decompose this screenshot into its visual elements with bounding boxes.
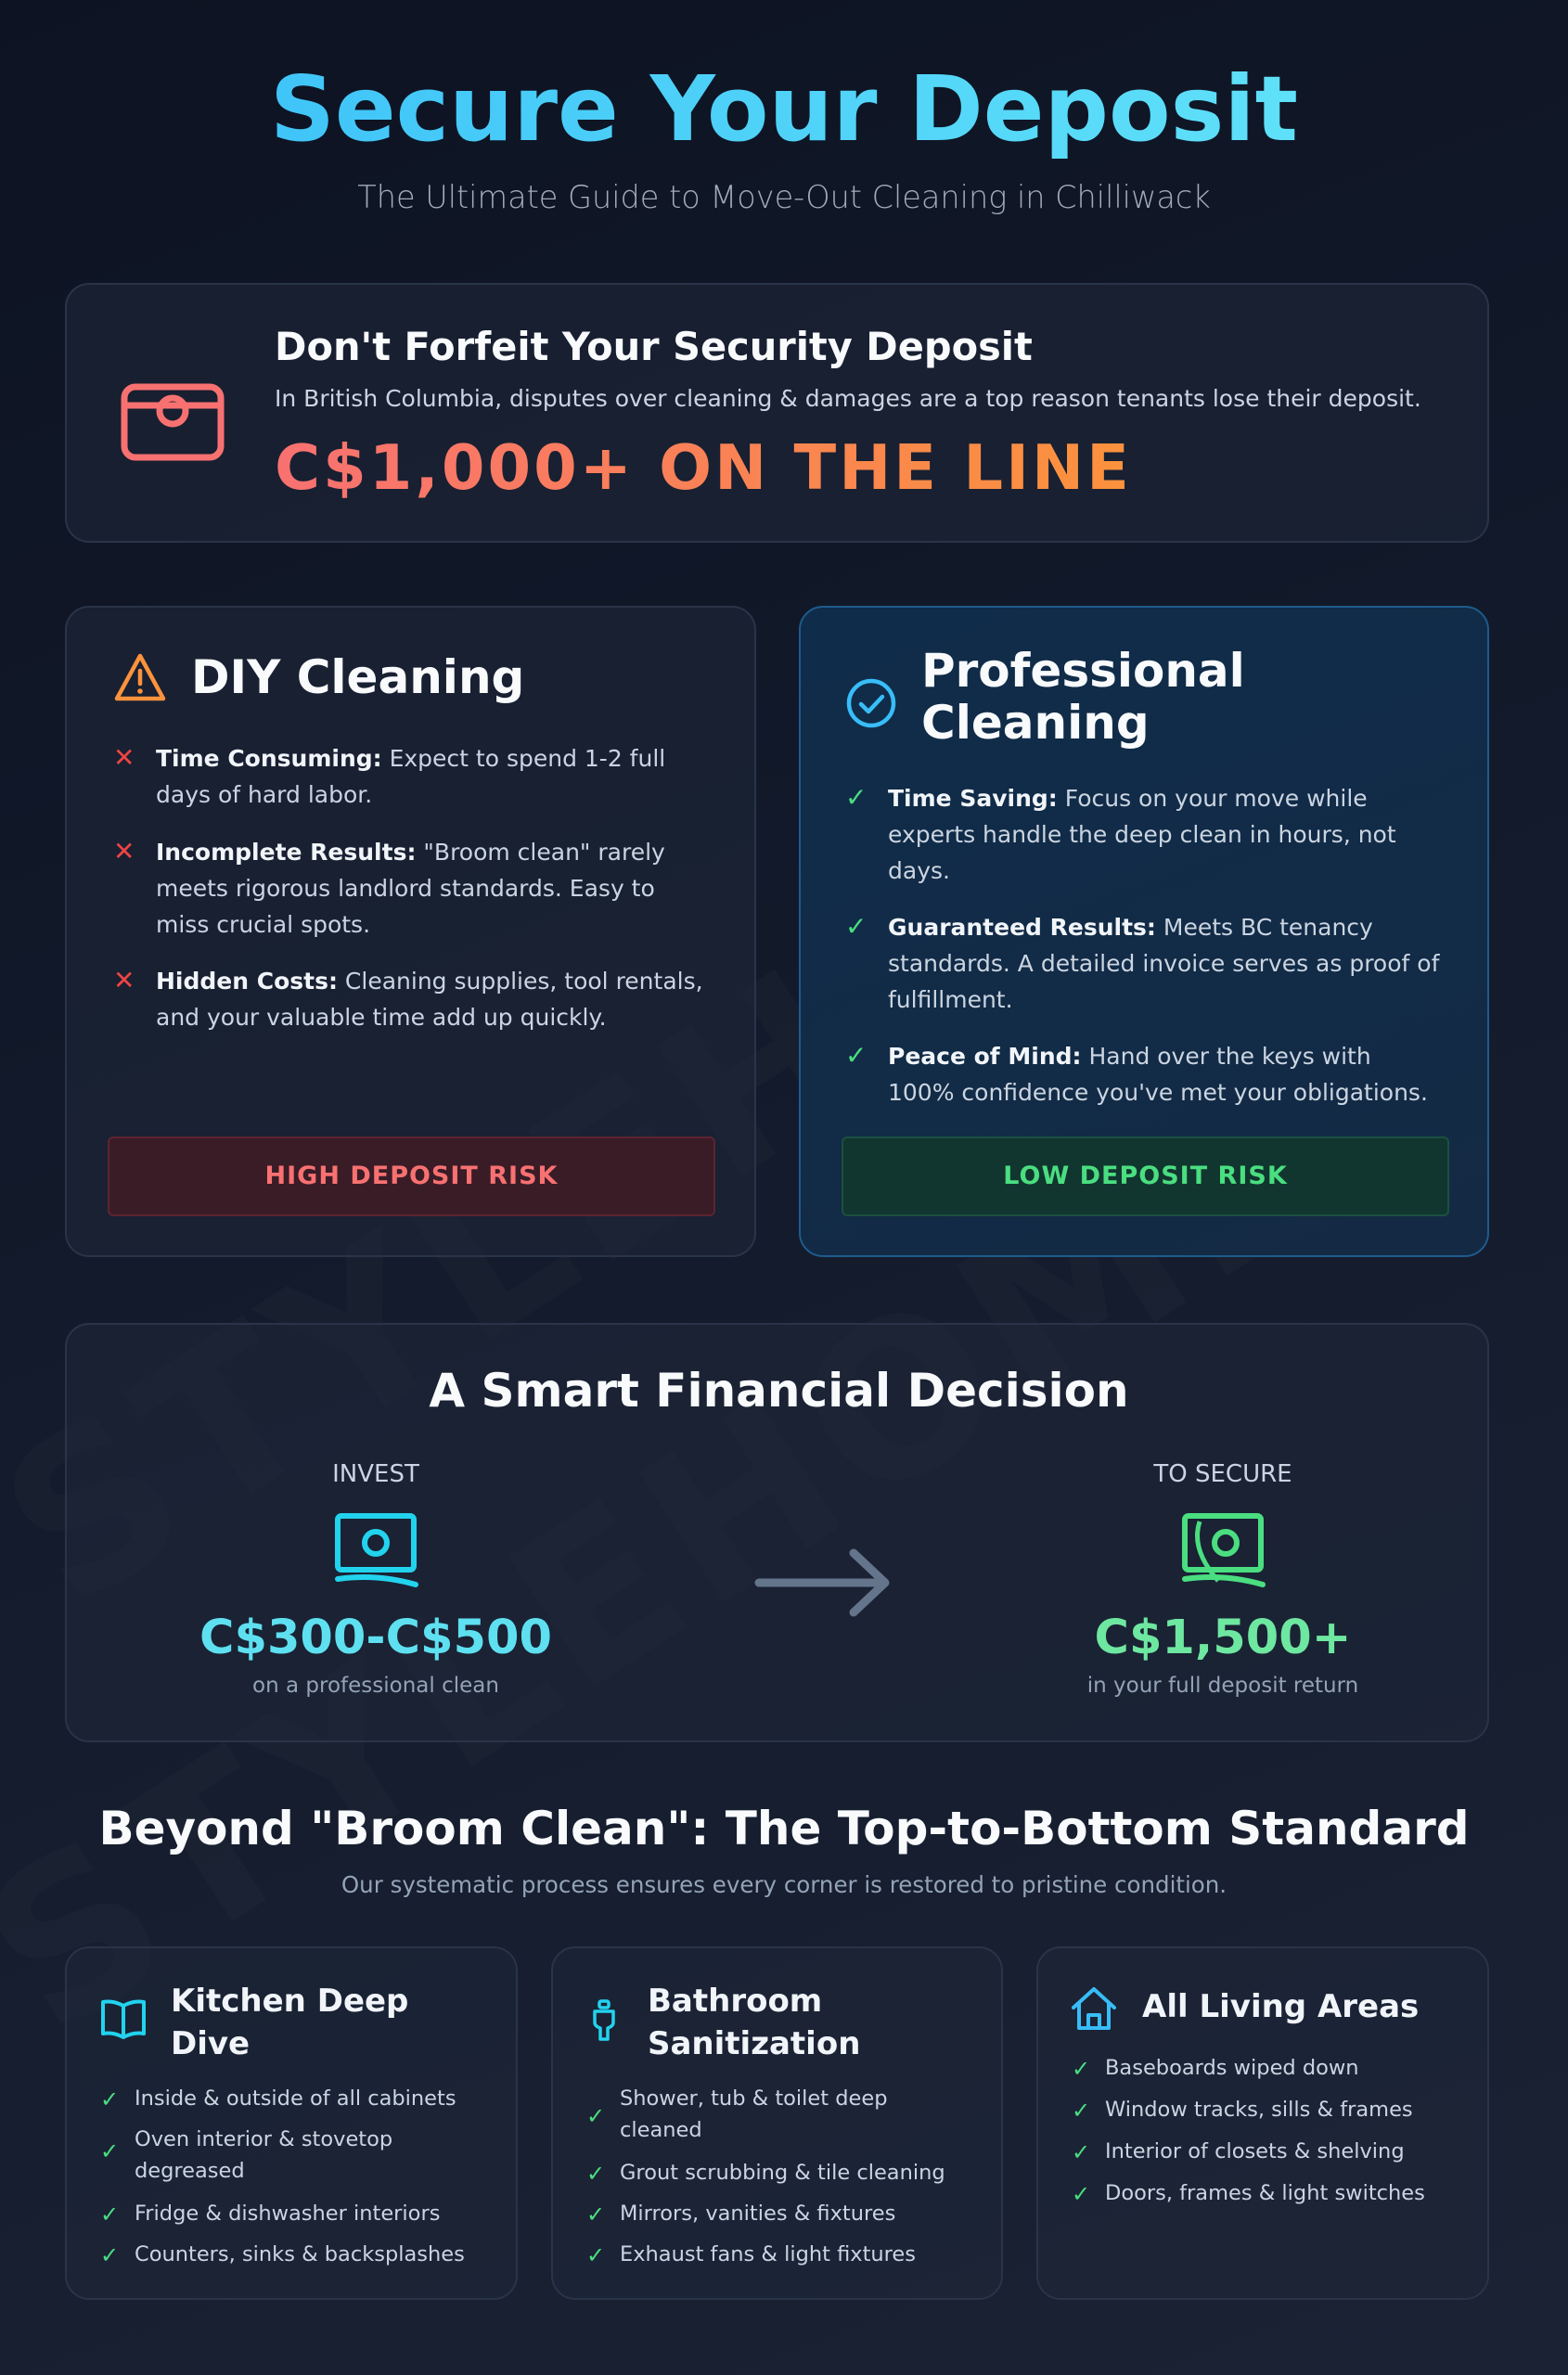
title (0, 52, 1568, 167)
list: Grout scrubbing & tile cleaning (620, 2161, 945, 2185)
secure block: in your full deposit return (1087, 1674, 1358, 1698)
list: ✓ (586, 2161, 605, 2187)
list: cons: ✕ (113, 742, 135, 773)
panel: living areas (1036, 1946, 1489, 2300)
heading: Kitchen Deep (171, 1983, 408, 2020)
title: Secure Your Deposit (270, 57, 1298, 161)
arrow (755, 1549, 889, 1616)
panel: professional cleaning (799, 606, 1489, 1257)
list: Mirrors, vanities & fixtures (620, 2202, 895, 2226)
list: pros: Peace of Mind: Hand over the keys with (888, 1043, 1371, 1070)
panel: financial decision (65, 1323, 1489, 1742)
heading: Dive (171, 2025, 250, 2062)
list (586, 2086, 945, 2268)
list: pros: ✓ (845, 911, 867, 942)
secure block: TO SECURE (1153, 1460, 1292, 1488)
list: Doors, frames & light switches (1105, 2181, 1425, 2205)
heading: Professional (921, 644, 1245, 698)
list: Inside & outside of all cabinets (135, 2086, 456, 2111)
list: Fridge & dishwasher interiors (135, 2202, 440, 2226)
list: cons: Hidden Costs: Cleaning supplies, tool rentals, and your valuable time add up quickly. (156, 968, 703, 1031)
list: cons: Time Consuming: Expect to spend 1-2 full days of hard labor. (156, 745, 665, 808)
heading: Don't Forfeit Your Security Deposit (275, 324, 1033, 369)
heading: Cleaning (921, 696, 1150, 750)
heading (171, 1983, 408, 2062)
invest block: INVEST (332, 1460, 419, 1488)
list: ✓ (586, 2242, 605, 2268)
list: pros: Time Saving: Focus on your move while experts handle the deep clean in hours, not days. (888, 785, 1396, 884)
invest block: C$300-C$500 (199, 1611, 552, 1665)
badge: high risk: HIGH DEPOSIT RISK (265, 1162, 558, 1190)
badge: low risk (842, 1136, 1449, 1216)
list: cons: ✕ (113, 836, 135, 867)
heading (648, 1983, 860, 2062)
invest block: on a professional clean (252, 1674, 499, 1698)
list: ✓ (586, 2103, 605, 2129)
icon: house (1071, 1987, 1117, 2030)
section subtitle: Our systematic process ensures every corner is restored to pristine condition. (341, 1871, 1227, 1898)
list: pros (845, 782, 1440, 1106)
icon: book (101, 2000, 146, 2039)
description: In British Columbia, disputes over cleaning & damages are a top reason tenants lose their deposit. (275, 385, 1421, 412)
heading: DIY Cleaning (191, 650, 524, 704)
panel: deposit warning (65, 283, 1489, 543)
panel: DIY cleaning (65, 606, 756, 1257)
badge: low risk: LOW DEPOSIT RISK (1003, 1162, 1288, 1190)
list (1072, 2056, 1425, 2207)
heading (921, 644, 1245, 750)
callout: amount: C$1,000+ ON THE LINE (275, 431, 1132, 504)
list: cons: Incomplete Results: "Broom clean" rarely meets rigorous landlord standards. Easy to miss crucial spots. (156, 839, 665, 938)
heading: All Living Areas (1142, 1988, 1419, 2025)
list: ✓ (100, 2202, 119, 2227)
list: ✓ (100, 2242, 119, 2268)
heading: Bathroom (648, 1983, 822, 2020)
heading: Sanitization (648, 2025, 860, 2062)
list: Exhaust fans & light fixtures (620, 2242, 916, 2266)
list: Counters, sinks & backsplashes (135, 2242, 465, 2266)
list: pros: ✓ (845, 1040, 867, 1071)
list: pros: 100% confidence you've met your obligations. (888, 1079, 1428, 1106)
list: pros: ✓ (845, 782, 867, 813)
list: Shower, tub & toilet deep cleaned (620, 2086, 887, 2142)
subtitle: The Ultimate Guide to Move-Out Cleaning in Chilliwack (357, 179, 1211, 215)
section heading: Beyond "Broom Clean": The Top-to-Bottom Standard (98, 1802, 1470, 1855)
list: cons (113, 742, 703, 1031)
list: ✓ (1072, 2139, 1090, 2165)
list: Baseboards wiped down (1105, 2056, 1359, 2080)
text: STYLEHOME (0, 610, 1387, 1655)
list: Oven interior & stovetop degreased (135, 2127, 392, 2183)
list: ✓ (100, 2138, 119, 2164)
icon: check circle (846, 679, 896, 727)
list: ✓ (586, 2202, 605, 2227)
list: ✓ (100, 2086, 119, 2112)
list: cons: ✕ (113, 965, 135, 995)
invest block (199, 1460, 552, 1698)
list: Window tracks, sills & frames (1105, 2098, 1413, 2122)
icon: cash green (1182, 1513, 1266, 1587)
list: ✓ (1072, 2056, 1090, 2082)
list: Interior of closets & shelving (1105, 2139, 1405, 2163)
icon: wallet (121, 384, 225, 460)
icon: warning (115, 653, 165, 701)
secure block (1087, 1460, 1358, 1698)
list: pros: Guaranteed Results: Meets BC tenancy standards. A detailed invoice serves as proof of fulfillment. (888, 914, 1439, 1013)
heading: A Smart Financial Decision (429, 1364, 1129, 1418)
secure block: C$1,500+ (1095, 1611, 1351, 1665)
icon: cash (335, 1513, 418, 1587)
panel: kitchen (65, 1946, 518, 2300)
panel: bathroom (551, 1946, 1003, 2300)
list (100, 2086, 465, 2268)
list: ✓ (1072, 2098, 1090, 2124)
icon: spray (593, 1999, 615, 2041)
list: ✓ (1072, 2181, 1090, 2207)
badge: high risk (108, 1136, 715, 1216)
